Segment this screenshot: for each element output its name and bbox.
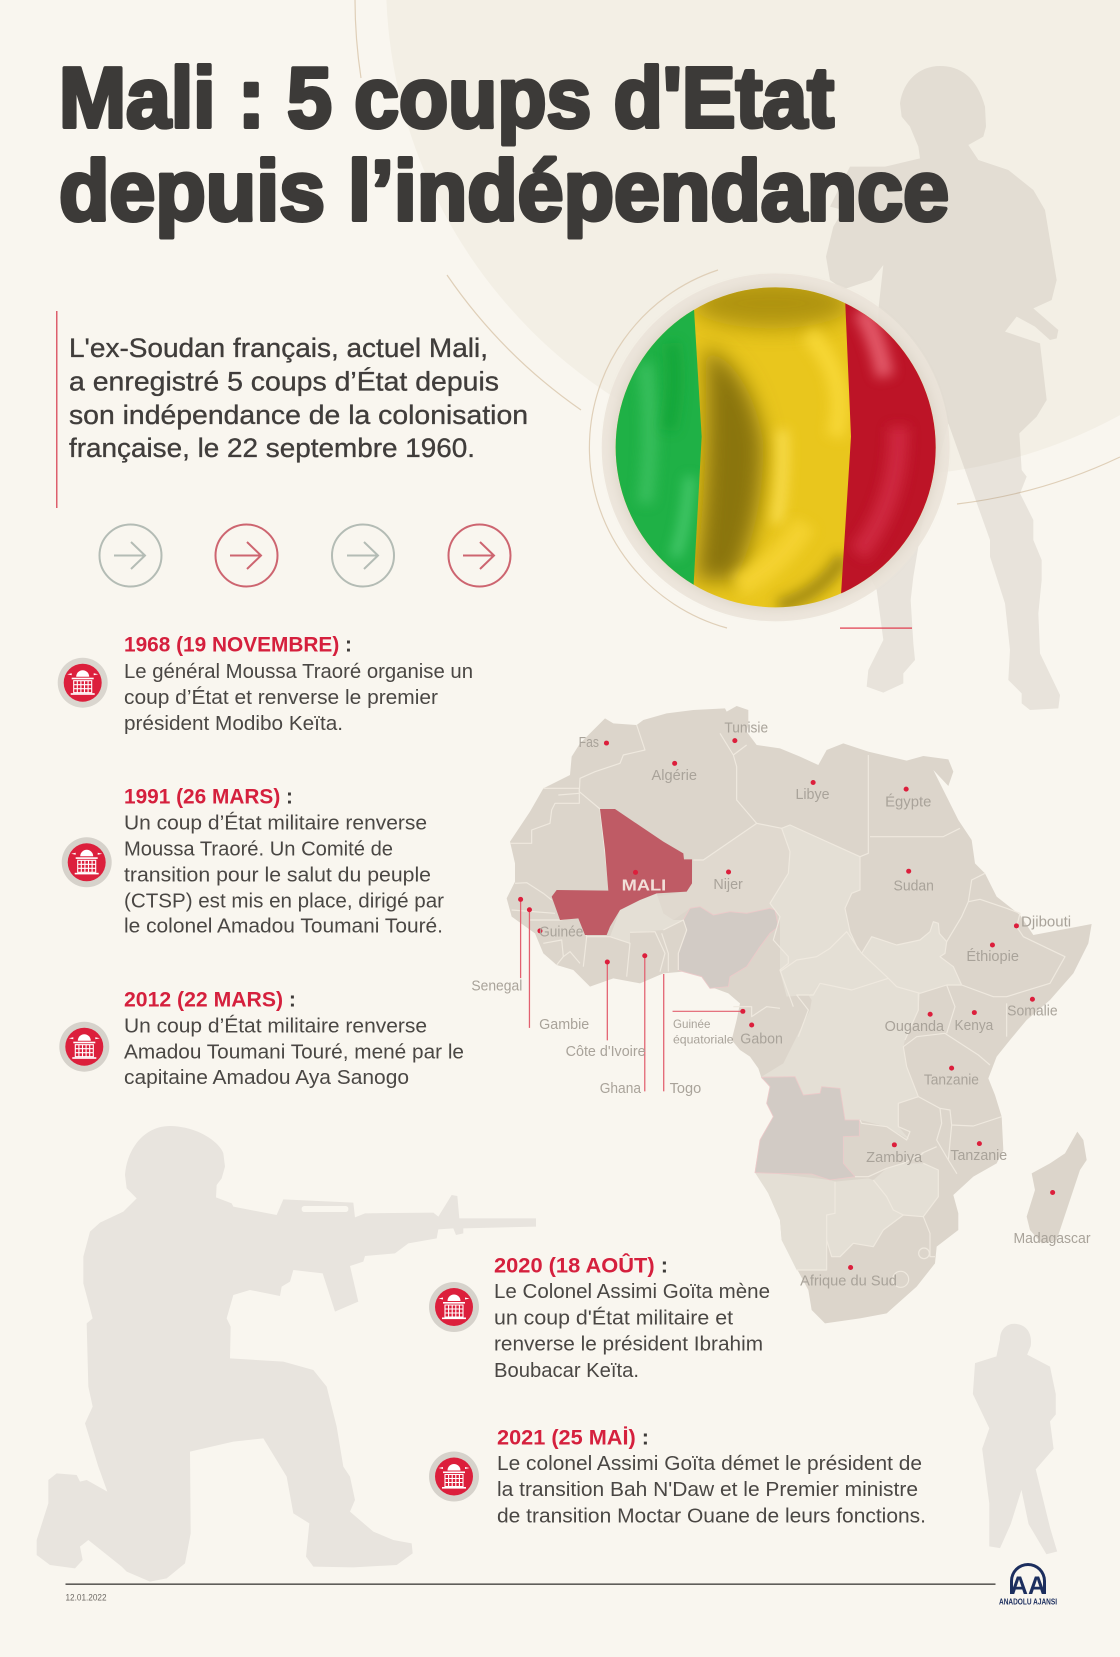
logo: Anadolu Ajansi bbox=[999, 1563, 1057, 1607]
arrow 1 bbox=[100, 524, 162, 586]
red stripe bbox=[841, 297, 942, 600]
country labels: Zambiya bbox=[866, 1149, 923, 1166]
intro text: a enregistré 5 coups d’État depuis bbox=[69, 366, 499, 396]
Mali highlighted bbox=[552, 809, 692, 935]
heading 1991: 1991 (26 MARS) : bbox=[124, 785, 293, 808]
country labels: Gabon bbox=[740, 1031, 783, 1048]
title bbox=[59, 51, 949, 239]
text 1968: coup d’État et renverse le premier bbox=[124, 686, 438, 709]
text 2020: renverse le président Ibrahim bbox=[494, 1334, 763, 1356]
heading 1968: 1968 (19 NOVEMBRE) : bbox=[124, 634, 352, 657]
green stripe bbox=[616, 310, 702, 585]
event 2021 bbox=[429, 1426, 926, 1527]
text 1991: Un coup d’État militaire renverse bbox=[124, 811, 427, 834]
country borders bbox=[510, 725, 1065, 1287]
country labels: Senegal bbox=[471, 978, 522, 995]
logo: Anadolu Ajansi: AA bbox=[1010, 1572, 1046, 1600]
flag of Mali bbox=[602, 273, 950, 621]
Madagascar bbox=[1027, 1132, 1087, 1243]
text 2020: un coup d'État militaire et bbox=[494, 1306, 733, 1330]
event 1968 bbox=[58, 634, 473, 735]
map of Africa bbox=[471, 706, 1092, 1323]
country labels: Côte d'Ivoire bbox=[566, 1043, 646, 1060]
Angola bbox=[755, 1077, 859, 1180]
icon: government building bbox=[59, 1022, 109, 1072]
country labels: Égypte bbox=[885, 794, 931, 810]
text 2020: Le Colonel Assimi Goïta mène bbox=[494, 1281, 770, 1303]
intro text: son indépendance de la colonisation bbox=[69, 400, 528, 430]
text 2012 bbox=[124, 1015, 464, 1089]
country labels: Somalie bbox=[1007, 1003, 1058, 1019]
text 1991: transition pour le salut du peuple bbox=[124, 864, 431, 886]
country labels: Éthiopie bbox=[966, 948, 1019, 965]
country labels: Kenya bbox=[955, 1017, 994, 1034]
logo: Anadolu Ajansi: ANADOLU AJANSI bbox=[999, 1598, 1057, 1607]
country labels: Tanzanie bbox=[950, 1147, 1007, 1164]
footer rule bbox=[66, 1584, 996, 1585]
country labels: Guinée bbox=[539, 924, 583, 941]
arrow 4 bbox=[448, 524, 510, 586]
text 2021 bbox=[497, 1453, 926, 1527]
map labels and pins bbox=[471, 720, 1091, 1289]
country labels: Tunisie bbox=[724, 720, 768, 737]
text 2012: capitaine Amadou Aya Sanogo bbox=[124, 1067, 409, 1089]
country labels: Gambie bbox=[539, 1016, 589, 1033]
title: depuis l’indépendance bbox=[59, 144, 949, 239]
text 1991: Moussa Traoré. Un Comité de bbox=[124, 838, 393, 860]
event 1991 bbox=[62, 785, 444, 938]
icon: government building bbox=[58, 658, 108, 708]
intro text bbox=[69, 333, 528, 463]
country labels bbox=[471, 720, 1091, 1289]
lighter countries bbox=[610, 823, 962, 1270]
title: Mali : 5 coups d'Etat bbox=[59, 51, 834, 146]
country labels: Sudan bbox=[894, 878, 934, 895]
decorative arcs bbox=[355, 0, 1120, 628]
country labels: équatoriale bbox=[673, 1034, 734, 1047]
icon: government building bbox=[429, 1452, 479, 1502]
country labels: Libye bbox=[795, 786, 830, 803]
Nigeria bbox=[678, 907, 778, 988]
country labels: Togo bbox=[670, 1080, 701, 1097]
country labels: Djibouti bbox=[1021, 913, 1071, 930]
country labels: Afrique du Sud bbox=[800, 1272, 897, 1289]
event 2020 bbox=[429, 1253, 770, 1382]
icon: government building bbox=[62, 837, 112, 887]
heading 2021: 2021 (25 MAİ) : bbox=[497, 1426, 649, 1449]
soldier silhouette: small, bottom right bbox=[973, 1324, 1057, 1554]
Mali label: MALI bbox=[622, 878, 666, 895]
arrow icons row bbox=[100, 524, 510, 586]
country labels: Madagascar bbox=[1013, 1230, 1091, 1247]
soldier silhouette: kneeling, bottom left bbox=[37, 1126, 536, 1582]
intro text: française, le 22 septembre 1960. bbox=[69, 433, 475, 463]
text 2021: la transition Bah N'Daw et le Premier ministre bbox=[497, 1479, 918, 1501]
soldier silhouette: standing, top right bbox=[826, 66, 1060, 710]
map shapes bbox=[507, 706, 1092, 1323]
text 1991: (CTSP) est mis en place, dirigé par bbox=[124, 890, 444, 912]
text 2020 bbox=[494, 1281, 770, 1382]
red accent line under flag bbox=[840, 628, 912, 629]
text 1991 bbox=[124, 811, 444, 938]
text 1968: président Modibo Keïta. bbox=[124, 713, 343, 735]
city dots bbox=[518, 738, 1055, 1270]
text 1991: le colonel Amadou Toumani Touré. bbox=[124, 916, 443, 938]
icon: government building bbox=[429, 1282, 479, 1332]
arrow 3 bbox=[332, 524, 394, 586]
text 2021: de transition Moctar Ouane de leurs fonctions. bbox=[497, 1505, 926, 1527]
text 1968: Le général Moussa Traoré organise un bbox=[124, 661, 473, 683]
event 2012 bbox=[59, 989, 464, 1089]
arrow 2 bbox=[216, 524, 278, 586]
text 2020: Boubacar Keïta. bbox=[494, 1360, 639, 1382]
country labels: Guinée bbox=[673, 1018, 710, 1031]
Africa continent bbox=[507, 706, 1092, 1323]
text 2021: Le colonel Assimi Goïta démet le président de bbox=[497, 1453, 922, 1475]
red rule beside intro bbox=[56, 311, 58, 508]
country labels: Tanzanie bbox=[924, 1071, 979, 1088]
country labels: Ghana bbox=[600, 1080, 642, 1097]
country labels: Nijer bbox=[713, 876, 743, 893]
intro text: L'ex-Soudan français, actuel Mali, bbox=[69, 333, 488, 363]
background circle bbox=[386, 0, 1120, 476]
heading 2012: 2012 (22 MARS) : bbox=[124, 989, 296, 1012]
text 1968 bbox=[124, 661, 473, 735]
callout lines bbox=[521, 899, 743, 1091]
heading 2020: 2020 (18 AOÛT) : bbox=[494, 1253, 668, 1277]
country labels: Algérie bbox=[652, 767, 697, 784]
date: 12.01.2022 bbox=[66, 1592, 106, 1602]
country labels: Fas bbox=[579, 734, 599, 751]
text 2012: Amadou Toumani Touré, mené par le bbox=[124, 1042, 464, 1064]
country labels: Ouganda bbox=[885, 1018, 945, 1035]
text 2012: Un coup d’État militaire renverse bbox=[124, 1015, 427, 1038]
